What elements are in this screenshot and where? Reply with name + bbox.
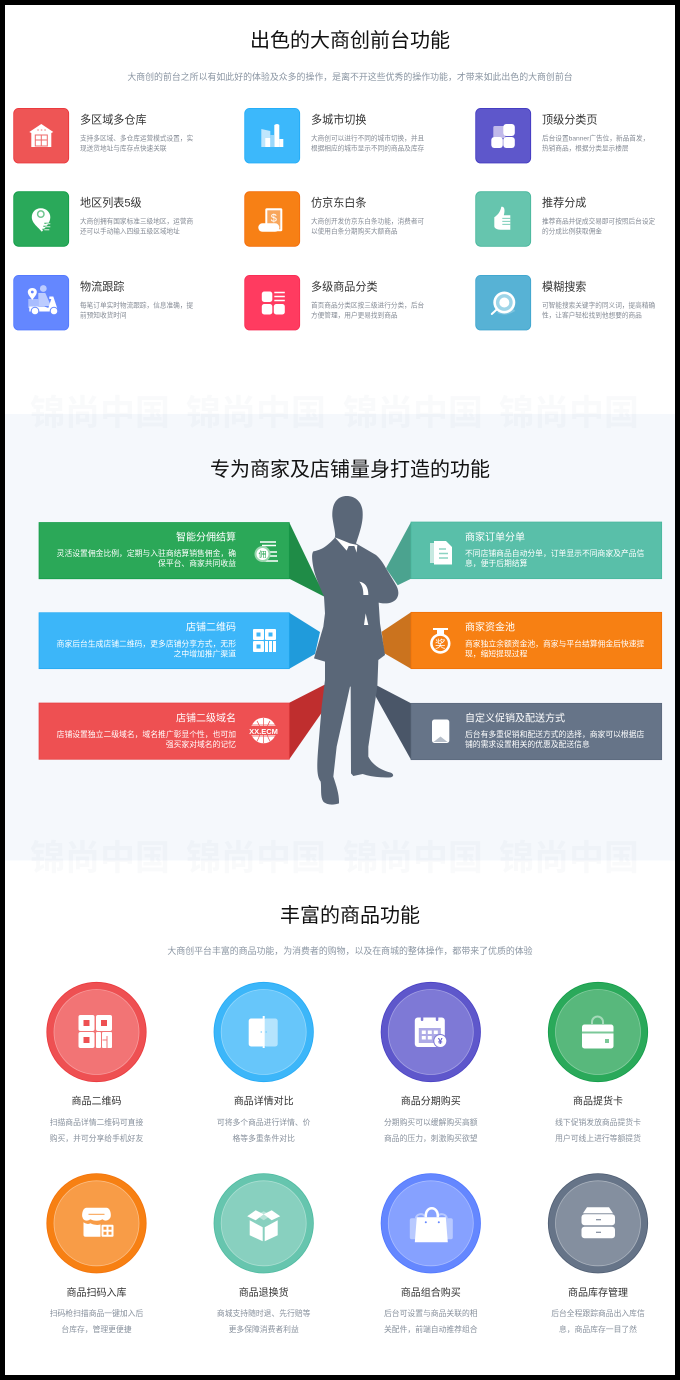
figure: businessman silhouette — [312, 496, 398, 805]
icon: magnifier — [476, 275, 531, 330]
icon: warehouse — [14, 108, 69, 163]
watermark: bottom row: 锦尚中国 — [30, 839, 170, 878]
icon: split door in circle — [214, 982, 313, 1082]
item title: 商品组合购买 — [401, 1286, 461, 1299]
feature description: 大商创可以进行不同的城市切换，并且 — [311, 133, 424, 142]
item description: 格等多重条件对比 — [233, 1133, 295, 1143]
feature description: 支持多区域、多仓库运营模式设置，实 — [80, 133, 193, 142]
icon: category grid — [245, 275, 300, 330]
ribbon description — [57, 638, 236, 658]
item description: 后台全程跟踪商品出入库信 — [551, 1308, 645, 1318]
feature title: 仿京东白条 — [311, 196, 366, 210]
icon: calendar with yen in circle: ¥ — [438, 1036, 443, 1046]
icon: QR code in circle — [47, 982, 146, 1082]
ribbon title: 店铺二维码 — [186, 621, 236, 634]
item description: 扫码枪扫描商品一键加入后 — [50, 1308, 143, 1318]
ribbon description: 强买家对域名的记忆 — [166, 739, 236, 749]
feature: JD-style credit — [245, 192, 424, 246]
icon: thumbs up — [476, 192, 531, 246]
feature description: 可智能搜索关键字的同义词，提高精确 — [542, 300, 655, 309]
feature description — [80, 300, 193, 319]
feature description — [311, 300, 424, 319]
ribbon description: 店铺设置独立二级域名，域名推广彰显个性，也可加 — [57, 729, 236, 739]
feature description — [542, 133, 649, 152]
feature title: 地区列表5级 — [80, 196, 142, 210]
feature description — [311, 133, 424, 152]
ribbon title: 商家订单分单 — [465, 530, 525, 544]
feature description: 性，让客户轻松找到他想要的商品 — [542, 310, 642, 319]
item description: 可将多个商品进行详情、价 — [217, 1117, 311, 1127]
watermark: bottom row — [30, 839, 639, 878]
item description: 商品的压力，刺激购买欲望 — [384, 1133, 478, 1143]
watermark: top row — [30, 394, 639, 433]
icon: calendar with yen in circle — [381, 982, 480, 1082]
watermark: bottom row: 锦尚中国 — [343, 839, 483, 878]
ribbon: custom promotion and delivery — [376, 685, 662, 760]
item description — [555, 1117, 641, 1143]
feature: top-level category page — [476, 108, 649, 163]
icon: city buildings — [245, 108, 300, 163]
ribbon description — [57, 729, 236, 749]
watermark: top row: 锦尚中国 — [499, 394, 639, 433]
item description — [50, 1117, 143, 1143]
product feature: inventory management — [548, 1174, 648, 1334]
icon: shopping bags in circle — [381, 1174, 480, 1273]
product feature: installment purchase — [381, 982, 480, 1143]
ribbon description — [465, 548, 645, 568]
icon: storage drawers in circle — [548, 1174, 648, 1273]
icon: receipt with dollar sign — [245, 192, 300, 246]
icon: category blocks — [476, 108, 531, 163]
watermark: bottom row: 锦尚中国 — [499, 839, 639, 878]
feature: multi-city switching — [245, 108, 424, 163]
product feature: bundle purchase — [381, 1174, 480, 1334]
feature title: 顶级分类页 — [542, 112, 597, 126]
ribbon description: 不同店铺商品自动分单，订单显示不同商家及产品信 — [465, 548, 645, 558]
ribbon description — [57, 548, 236, 568]
item description: 关配件，前端自动推荐组合 — [384, 1324, 478, 1334]
watermark: top row: 锦尚中国 — [186, 394, 326, 433]
feature description: 还可以手动输入四级五级区域地址 — [80, 227, 180, 236]
item title: 商品二维码 — [72, 1094, 122, 1108]
ribbon title: 智能分佣结算 — [176, 530, 236, 544]
item description — [384, 1117, 478, 1143]
ribbon description: 之中增加推广渠道 — [174, 648, 236, 658]
ribbon: merchant funds pool — [382, 612, 662, 669]
section intro: storefront features: 大商创的前台之所以有如此好的体验及众多的操作，是离不开这些优秀的操作功能，才带来如此出色的大商创前台 — [127, 71, 573, 82]
ribbon description: 铺的需求设置相关的优惠及配送信息 — [465, 739, 590, 749]
ribbon: smart commission settlement — [39, 522, 325, 597]
feature description — [80, 133, 193, 152]
feature description: 的分成比例获取佣金 — [542, 227, 602, 236]
feature description — [542, 300, 655, 319]
feature: logistics tracking — [14, 275, 193, 330]
feature title: 模糊搜索 — [542, 279, 586, 293]
feature: multi-level categories — [245, 275, 424, 330]
watermark: top row: 锦尚中国 — [30, 394, 170, 433]
item description — [50, 1308, 143, 1334]
item description: 息，商品库存一目了然 — [559, 1324, 637, 1334]
item description: 台库存，管理更便捷 — [61, 1324, 132, 1334]
feature description — [80, 217, 193, 236]
icon: prize medal: 奖 — [435, 638, 446, 650]
icon: open box in circle — [214, 1174, 313, 1273]
icon: commission coin: 佣 — [258, 549, 266, 559]
feature description — [311, 217, 424, 236]
feature title: 多区域多仓库 — [80, 112, 147, 126]
ribbon description: 商家独立余额资金池，商家与平台结算佣金后快速提 — [465, 638, 645, 648]
icon: QR code — [253, 629, 276, 652]
item description — [384, 1308, 478, 1334]
ribbon: store QR code — [39, 613, 320, 669]
item title: 商品扫码入库 — [66, 1286, 126, 1299]
product feature: product comparison — [214, 982, 313, 1143]
feature title: 物流跟踪 — [80, 279, 124, 293]
ribbon title: 商家资金池 — [465, 621, 515, 634]
watermark: bottom row: 锦尚中国 — [186, 839, 326, 878]
ribbon: merchant order splitting — [386, 522, 662, 585]
ribbon description: 息，便于后期结算 — [465, 558, 528, 568]
item description — [217, 1117, 311, 1143]
product feature: returns and exchanges — [214, 1174, 313, 1334]
item description: 分期购买可以缓解购买高额 — [384, 1117, 478, 1127]
feature description: 大商创开发仿京东白条功能，消费者可 — [311, 217, 424, 226]
item description: 后台可设置与商品关联的相 — [384, 1308, 478, 1318]
feature description: 以使用白条分期购买大额商品 — [311, 227, 398, 236]
icon: commission coin — [254, 542, 278, 562]
section heading: merchant features: 专为商家及店铺量身打造的功能 — [210, 458, 490, 481]
icon: globe with domain — [249, 718, 278, 743]
section intro: product features: 大商创平台丰富的商品功能，为消费者的购物，以及在商城的整体操作，都带来了优质的体验 — [167, 945, 533, 956]
item title: 商品退换货 — [239, 1286, 289, 1299]
item description: 商城支持随时退、先行赔等 — [217, 1308, 311, 1318]
ribbon: store subdomain — [39, 684, 325, 759]
ribbon description: 现，缩短提现过程 — [465, 648, 528, 658]
feature title: 多级商品分类 — [311, 279, 378, 293]
feature description: 根据相应的城市显示不同的商品及库存 — [311, 143, 424, 152]
section heading: storefront features: 出色的大商创前台功能 — [250, 29, 450, 52]
feature description — [542, 217, 655, 236]
item description: 更多保障消费者利益 — [229, 1324, 299, 1334]
item title: 商品详情对比 — [234, 1094, 294, 1108]
feature description: 首页商品分类区按三级进行分类，后台 — [311, 300, 424, 309]
item description: 用户可线上进行等额提货 — [555, 1133, 641, 1143]
product feature: scan to stock — [47, 1174, 146, 1334]
feature description: 方便管理，用户更易找到商品 — [311, 310, 398, 319]
icon: delivery scooter — [14, 275, 69, 330]
product feature: product QR code — [47, 982, 146, 1143]
item description: 购买，并可分享给手机好友 — [50, 1133, 143, 1143]
ribbon title: 自定义促销及配送方式 — [465, 712, 565, 724]
item title: 商品分期购买 — [401, 1094, 461, 1108]
icon: prize medal — [430, 628, 450, 654]
feature description: 现送货地址与库存点快速关联 — [80, 143, 167, 152]
feature description: 热销商品，根据分类显示楼层 — [542, 143, 629, 152]
ribbon description: 保平台、商家共同收益 — [158, 558, 236, 568]
icon: globe with domain: XX.ECM — [249, 727, 278, 736]
watermark: top row: 锦尚中国 — [343, 394, 483, 433]
icon: storefront with QR in circle — [47, 1174, 146, 1273]
feature description: 后台设置banner广告位，新品首发， — [542, 133, 649, 142]
product feature: pickup card — [548, 982, 648, 1143]
icon: receipt with dollar sign: $ — [271, 212, 277, 224]
feature description: 前预知收货时间 — [80, 310, 127, 319]
ribbon description: 灵活设置佣金比例，定期与入驻商结算销售佣金，确 — [57, 548, 236, 558]
item description: 扫描商品详情二维码可直接 — [50, 1117, 143, 1127]
icon: bookmark tag — [432, 720, 449, 743]
feature description: 每笔订单实时物流跟踪，信息准确，提 — [80, 300, 193, 309]
feature title: 推荐分成 — [542, 196, 586, 210]
feature: fuzzy search — [476, 275, 655, 330]
feature: multi-region warehouses — [14, 108, 193, 163]
item description — [217, 1308, 311, 1334]
panel: merchant features background — [5, 414, 675, 860]
feature title: 多城市切换 — [311, 112, 366, 126]
section heading: product features: 丰富的商品功能 — [280, 904, 420, 927]
item description: 线下促销发放商品提货卡 — [555, 1117, 641, 1127]
ribbon description — [465, 638, 645, 658]
feature description: 推荐商品并促成交易即可按照后台设定 — [542, 217, 655, 226]
icon: map pin — [14, 192, 69, 246]
feature: referral commission — [476, 192, 655, 246]
icon: document — [430, 541, 452, 564]
item title: 商品库存管理 — [568, 1286, 628, 1299]
item title: 商品提货卡 — [573, 1094, 623, 1108]
item description — [551, 1308, 645, 1334]
feature: five-level region list — [14, 192, 193, 246]
ribbon description: 商家后台生成店铺二维码，更多店铺分享方式，无形 — [57, 638, 236, 648]
ribbon description: 后台有多重促销和配送方式的选择，商家可以根据店 — [465, 729, 645, 739]
ribbon description — [465, 729, 645, 749]
ribbon title: 店铺二级域名 — [176, 712, 236, 724]
icon: card bag in circle — [548, 982, 648, 1082]
feature description: 大商创拥有国家标准三级地区，运营商 — [80, 217, 193, 226]
